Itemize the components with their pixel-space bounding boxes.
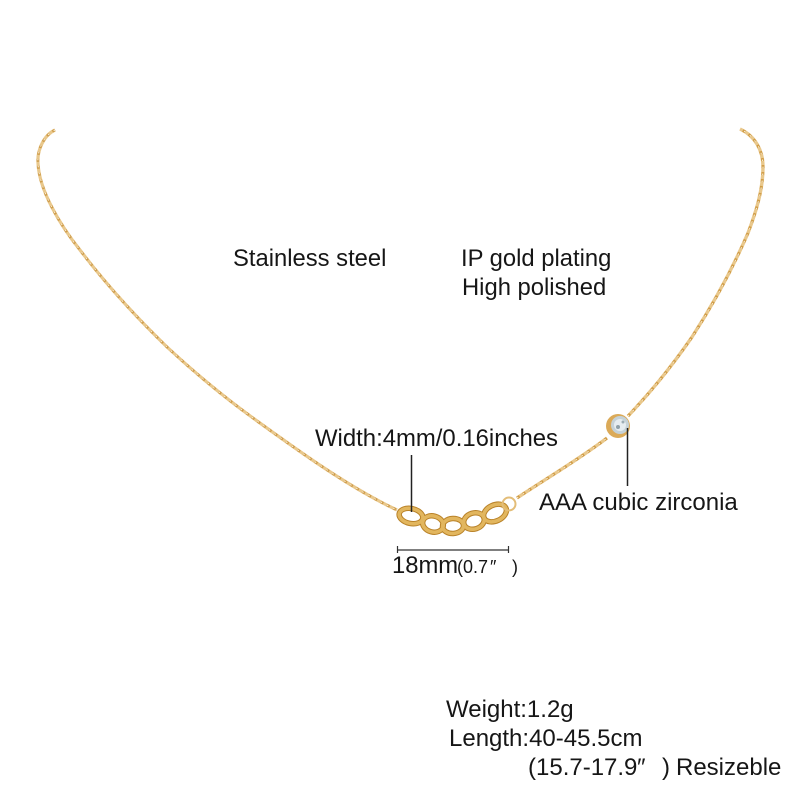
leader line: zirconia — [626, 428, 628, 486]
end jump ring — [502, 498, 516, 510]
leader line: width — [410, 455, 412, 512]
specs: weight and length: ″ — [637, 754, 646, 781]
link faces — [398, 501, 509, 534]
specs: weight and length: (15.7-17.9 — [528, 754, 637, 781]
curb link pendant — [398, 498, 516, 534]
label: 18mm dimension: ″ — [490, 557, 497, 577]
label: 18mm dimension: (0.7 — [457, 557, 488, 577]
chain: right side — [517, 129, 763, 498]
specs: weight and length: Length:40-45.5cm — [449, 725, 642, 752]
chain: left side — [38, 130, 397, 510]
specs: weight and length: Weight:1.2g — [446, 696, 574, 723]
label: plating and polish: IP gold plating — [461, 245, 611, 272]
link outlines — [398, 501, 509, 534]
specs: weight and length: Resizeble — [676, 754, 781, 781]
label: width: Width:4mm/0.16inches — [315, 425, 558, 452]
label: AAA cubic zirconia: AAA cubic zirconia — [539, 489, 738, 516]
label: plating and polish: High polished — [462, 274, 606, 301]
label: stainless steel: Stainless steel — [233, 245, 386, 272]
specs: weight and length: ) — [662, 754, 670, 781]
label: 18mm dimension: 18mm — [392, 552, 458, 579]
dimension bracket: 18mm — [398, 546, 508, 553]
label: 18mm dimension: ) — [512, 557, 518, 577]
zirconia bezel stone — [606, 414, 630, 438]
